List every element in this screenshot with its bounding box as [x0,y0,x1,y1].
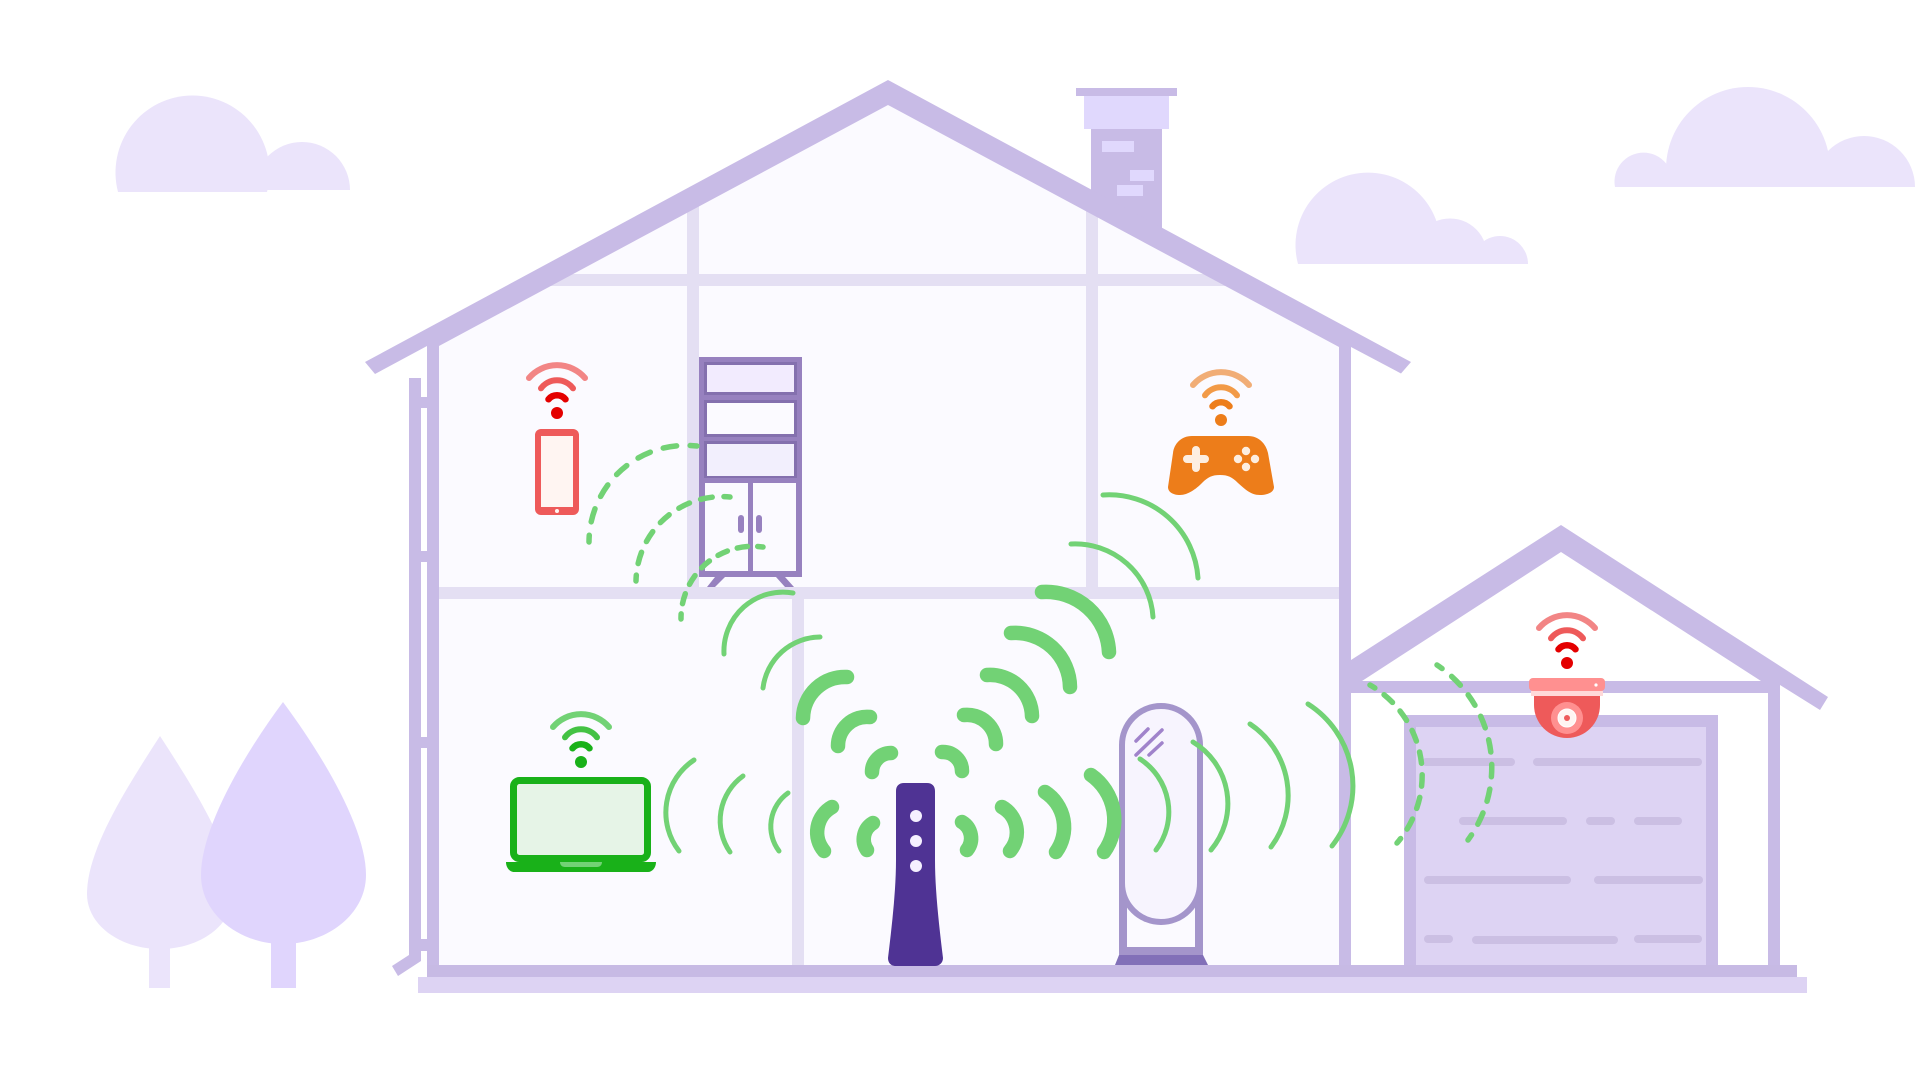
signal waves: weak dashed [589,445,1492,843]
house roof [365,80,1411,374]
wifi icon: controller [1193,372,1249,426]
house interior [439,105,1339,965]
phone [535,429,579,515]
cloud: middle [1296,173,1528,264]
cloud: left [116,96,350,192]
wifi icon: phone [529,365,585,419]
security camera [1529,678,1605,738]
garage door [1404,715,1718,966]
wifi icon: laptop [553,714,609,768]
tree: small [87,736,233,988]
house walls [427,340,1351,966]
chimney [1076,88,1177,232]
drainpipe [392,378,429,976]
cloud: right [1614,87,1915,187]
interior framing [439,200,1339,965]
laptop [506,780,656,872]
garage [1351,525,1828,966]
tree: large [201,702,366,988]
wifi icon: camera [1539,615,1595,669]
game controller [1168,436,1274,495]
signal waves: strong [803,592,1114,852]
signal waves: medium [666,495,1353,852]
router [888,783,943,966]
bookcase [699,357,802,587]
floor beam [427,965,1797,977]
foundation [418,977,1807,993]
mirror [1115,706,1208,965]
